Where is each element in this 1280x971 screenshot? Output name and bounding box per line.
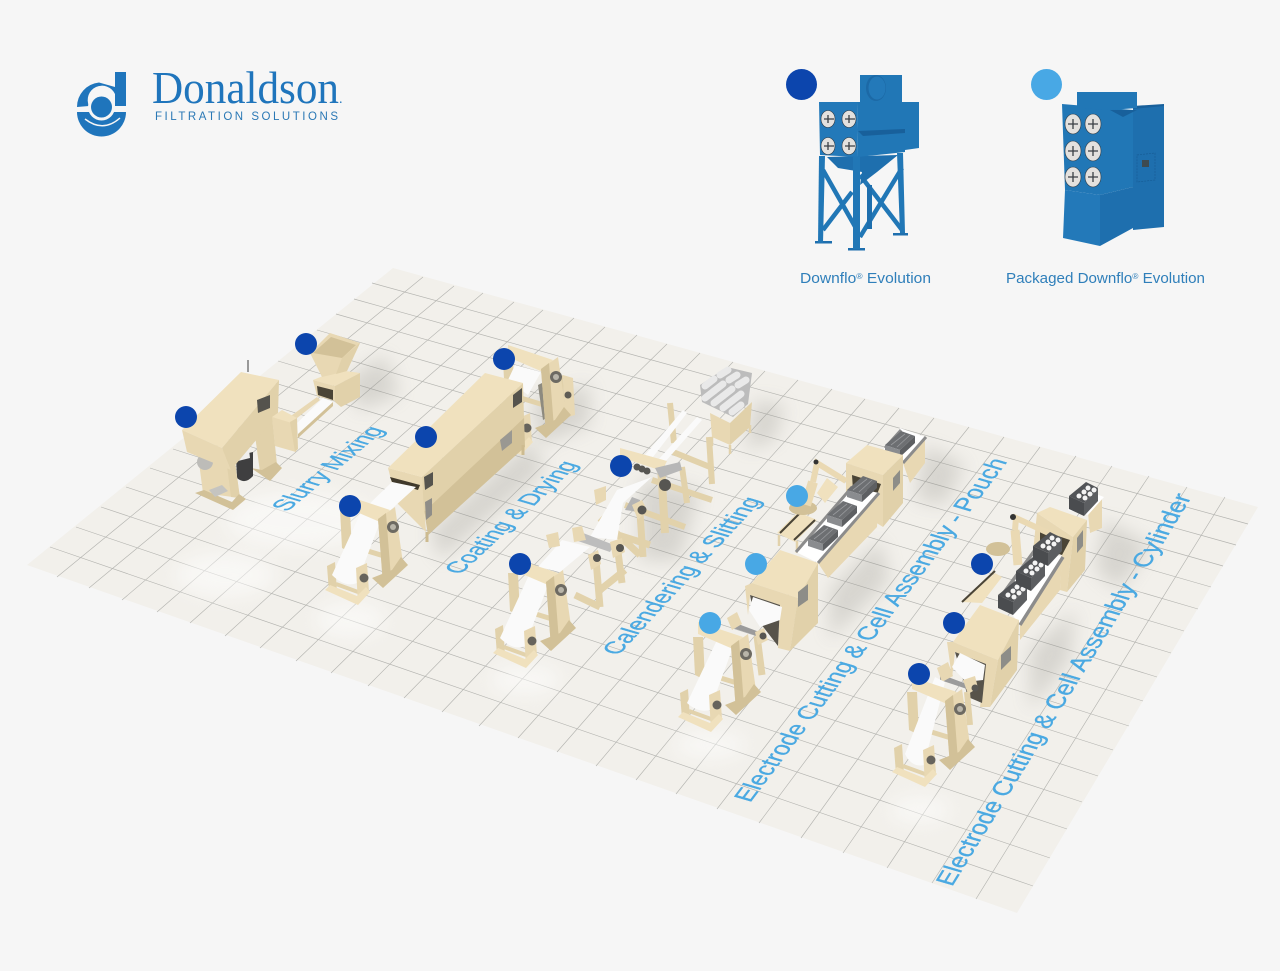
mixer front leg	[195, 448, 246, 510]
rear conveyor	[883, 428, 926, 483]
connector box	[272, 410, 298, 452]
machine: coating oven	[388, 373, 525, 542]
legend label: ®	[1132, 272, 1139, 281]
label: electrode cutting and cell assembly cylinder: Electrode Cutting & Cell Assembly - Cylinder	[931, 490, 1198, 889]
cylinder nip roller	[937, 662, 978, 725]
pouch unwinder	[678, 622, 761, 732]
slit strips	[645, 410, 702, 462]
legend label: Evolution	[863, 271, 931, 287]
legend label: Evolution	[1138, 271, 1205, 287]
legend: Packaged Downflo Evolution	[1006, 69, 1205, 287]
machine: electrode cutting and cylinder assembly	[892, 482, 1104, 787]
rear conveyor	[1068, 482, 1104, 533]
machine: coating rear unwinder	[488, 345, 575, 455]
machine: slurry mixer	[182, 360, 282, 510]
calender unwinder	[493, 558, 576, 668]
robot table	[777, 478, 838, 553]
stacked electrode rolls	[700, 367, 752, 417]
machine: calendering and slitting	[493, 367, 752, 668]
label: coating and drying: Coating & Drying	[439, 458, 584, 577]
rear enclosure	[1033, 507, 1087, 592]
hopper funnel	[310, 333, 360, 377]
robot	[962, 514, 1053, 603]
label: calendering and slitting: Calendering & Slitting	[597, 494, 768, 658]
cylinder unwinder	[892, 677, 975, 787]
robot arm	[789, 460, 846, 515]
machine: coating front unwinder	[325, 482, 416, 605]
mixer back leg	[251, 415, 282, 481]
legend marker dark blue	[786, 69, 817, 100]
step labels	[266, 424, 1198, 889]
legend label: ®	[856, 272, 863, 281]
floor	[27, 268, 1258, 913]
web to roll	[332, 512, 380, 584]
machine: conveyor and hopper	[272, 333, 360, 452]
rear frames	[625, 403, 712, 533]
logo: Donaldson	[77, 63, 342, 136]
machine: electrode cutting and pouch assembly	[678, 428, 926, 732]
mixing pot	[232, 441, 253, 481]
logo tagline: FILTRATION SOLUTIONS	[155, 111, 338, 123]
label: electrode cutting and cell assembly pouch: Electrode Cutting & Cell Assembly - Pouch	[729, 455, 1013, 805]
legend label: Downflo	[800, 271, 852, 287]
logo mark	[77, 72, 126, 136]
label: slurry mixing: Slurry Mixing	[266, 424, 391, 514]
roll rack table	[710, 402, 752, 454]
cutter enclosure	[745, 550, 818, 651]
mixer head	[182, 360, 279, 470]
pouch conveyor	[796, 476, 879, 578]
collector: Packaged Downflo Evolution	[1062, 92, 1164, 246]
cylinder conveyor	[998, 532, 1063, 640]
web to oven	[365, 482, 416, 515]
rear enclosure	[846, 445, 903, 527]
floor shadows and reflections	[175, 355, 1150, 824]
logo wordmark: Donaldson	[152, 63, 339, 113]
filter location markers	[175, 333, 993, 685]
legend: Downflo Evolution	[786, 69, 931, 287]
pouch nip roller	[727, 612, 768, 675]
hopper base	[313, 370, 360, 407]
slitter rollers	[620, 448, 682, 491]
middle rollers and web	[590, 477, 652, 557]
collector: Downflo Evolution	[815, 75, 919, 250]
legend label: Packaged Downflo	[1006, 271, 1127, 287]
logo registered dot: .	[339, 92, 342, 107]
cutter enclosure	[947, 605, 1019, 707]
front rollers and web	[538, 526, 625, 607]
legend marker light blue	[1031, 69, 1062, 100]
conveyor	[288, 397, 333, 438]
